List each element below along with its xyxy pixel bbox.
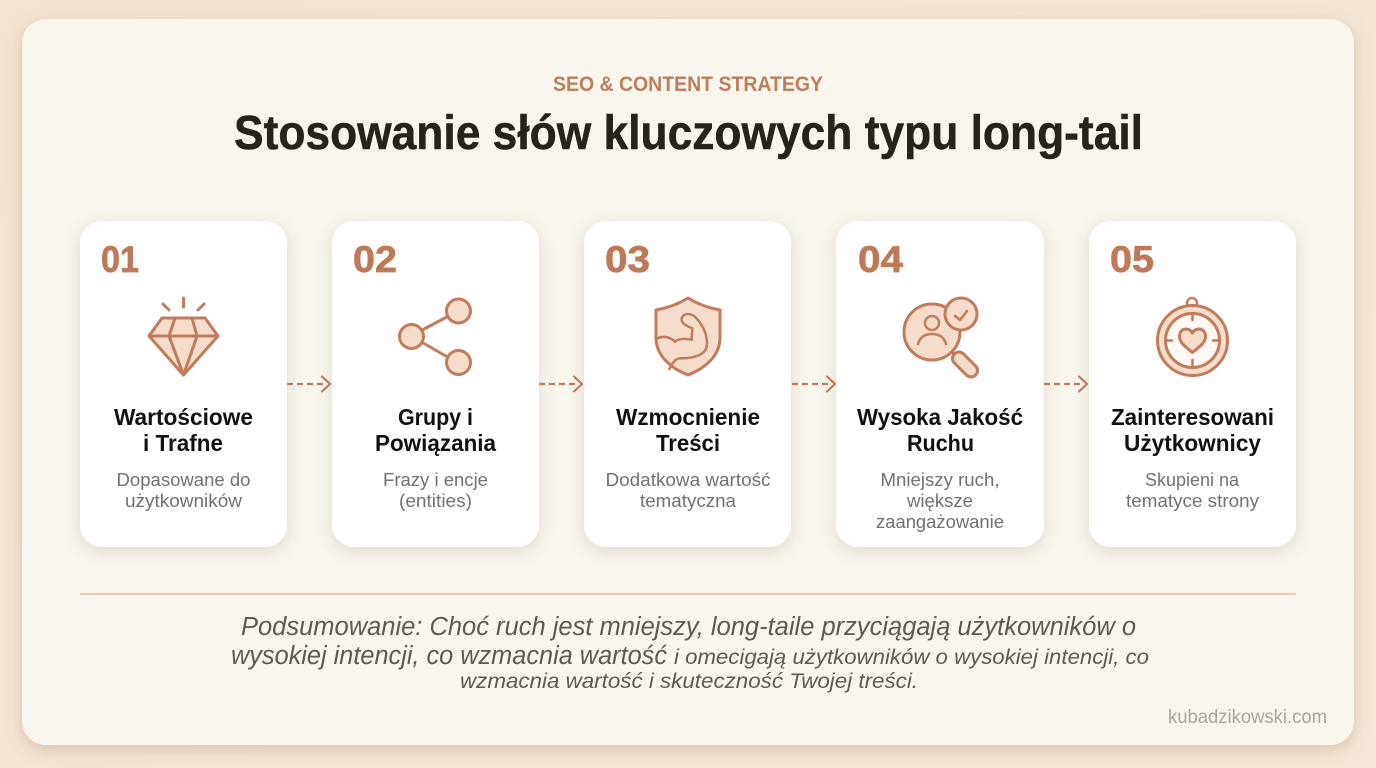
heading: i Trafne: [143, 430, 223, 456]
number 05: 05: [1110, 239, 1154, 280]
heading: [1111, 404, 1274, 456]
number 02: 02: [353, 239, 397, 280]
summary text: [231, 613, 1149, 693]
arrow 4: [1044, 376, 1087, 392]
summary text: wysokiej intencji, co wzmacnia wartość: [231, 642, 667, 670]
footer credit: kubadzikowski.com: [1168, 707, 1327, 728]
description: [116, 470, 250, 511]
icon: diamond: [149, 298, 218, 375]
description: większe: [906, 491, 973, 511]
description: [383, 470, 488, 511]
arrow 3: [792, 376, 835, 392]
description: tematyczna: [640, 491, 737, 511]
icon: shield with muscle: [656, 298, 720, 375]
summary text: Podsumowanie: Choć ruch jest mniejszy, long-taile przyciągają użytkowników o: [241, 613, 1136, 641]
number 03: 03: [605, 239, 650, 280]
heading: Wysoka Jakość: [857, 404, 1023, 430]
heading: Wartościowe: [114, 404, 253, 430]
arrow 2: [539, 376, 582, 392]
panel: card 03: [584, 221, 791, 547]
icon: compass with heart: [1158, 298, 1228, 376]
number 04: 04: [858, 239, 903, 280]
heading: Grupy i: [398, 404, 473, 430]
summary text: i omecigają użytkowników o wysokiej intencji, co: [674, 646, 1149, 669]
heading: Treści: [656, 430, 720, 456]
description: [876, 470, 1004, 532]
panel: card 05: [1089, 221, 1296, 547]
icon: share nodes: [400, 299, 470, 374]
heading: Powiązania: [375, 430, 496, 456]
description: [606, 470, 770, 511]
description: użytkowników: [125, 491, 243, 511]
description: Dopasowane do: [116, 470, 250, 490]
description: Frazy i encje: [383, 470, 488, 490]
heading: [375, 404, 496, 456]
heading: Wzmocnienie: [616, 404, 760, 430]
heading: Użytkownicy: [1124, 430, 1261, 456]
heading: [114, 404, 253, 456]
panel: card 02: [332, 221, 539, 547]
heading: Zainteresowani: [1111, 404, 1274, 430]
heading: [857, 404, 1023, 456]
description: zaangażowanie: [876, 512, 1004, 532]
description: [1126, 470, 1259, 511]
description: Dodatkowa wartość: [606, 470, 770, 490]
description: tematyce strony: [1126, 491, 1259, 511]
description: (entities): [399, 491, 472, 511]
number 01: 01: [101, 239, 139, 280]
panel: card 04: [836, 221, 1044, 547]
title: Stosowanie słów kluczowych typu long-tail: [234, 107, 1143, 160]
description: Mniejszy ruch,: [880, 470, 1000, 490]
summary text: wzmacnia wartość i skuteczność Twojej treści.: [460, 670, 918, 693]
icon: magnifier with user and check: [904, 298, 980, 380]
heading: [616, 404, 760, 456]
arrow 1: [287, 376, 330, 392]
heading: Ruchu: [907, 430, 974, 456]
kicker: SEO & CONTENT STRATEGY: [553, 73, 823, 96]
description: Skupieni na: [1145, 470, 1240, 490]
panel: card 01: [80, 221, 287, 547]
